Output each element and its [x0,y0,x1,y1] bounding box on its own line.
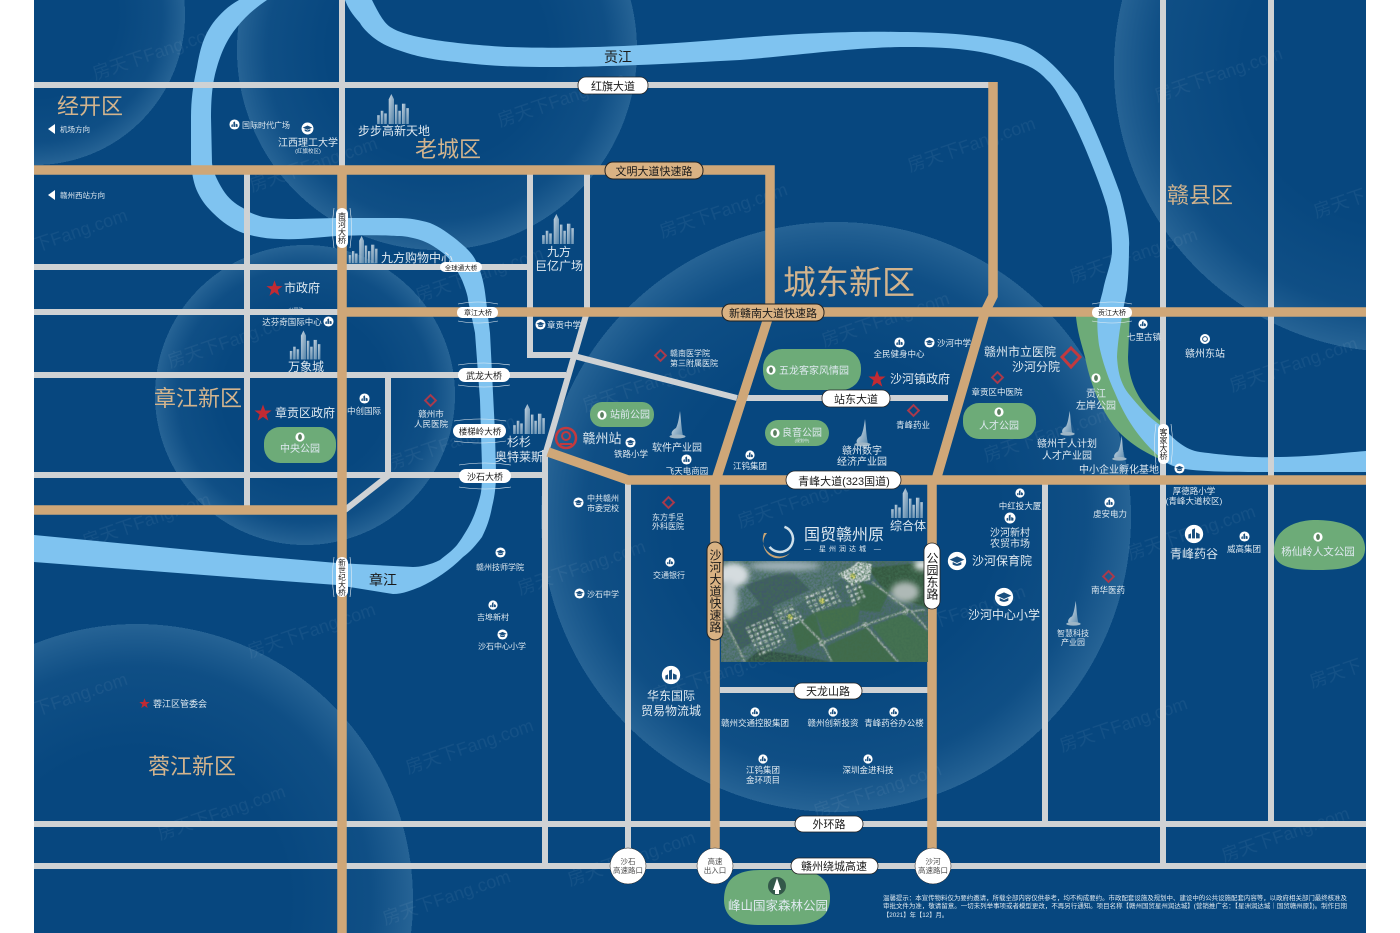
poi: 市政府 [266,280,320,296]
poi: 万象城 [288,331,324,374]
poi: 智慧科技产业园: 产业园 [1061,637,1085,647]
watermarks: 下Fang.com [31,669,130,720]
bridge: 楼梯岭大桥: 楼梯岭大桥 [459,426,502,436]
poi: 赣南医学院第三附属医院: 第三附属医院 [670,358,718,368]
poi: 青峰药业 [896,405,930,430]
poi: 中共赣州市委党校: 中共赣州 [587,493,619,503]
bridge: 章江大桥 [457,302,498,323]
park: 站前公园: 站前公园 [610,408,650,421]
poi: 赣州千人计划人才产业园: 人才产业园 [1042,449,1092,462]
label: 文明大道快速路: 文明大道快速路 [616,164,692,178]
exit: 高速出入口 [697,848,733,884]
poi: 章贡区中医院 [971,372,1023,397]
poi: 沙河保育院 [948,552,1032,570]
poi: 华东国际贸易物流城: 华东国际 [647,689,695,703]
label: 红旗大道 [578,77,648,94]
park: 人才公园: 人才公园 [979,419,1019,432]
poi: 贡江左岸公园: 贡江 [1086,388,1106,400]
district: 赣县区: 赣县区 [1167,183,1233,208]
poi: 沙河保育院: 沙河保育院 [972,553,1032,568]
poi: 深圳金进科技 [842,754,894,775]
poi: 杉杉奥特莱斯: 奥特莱斯 [495,449,543,464]
poi: 吉埠新村 [477,600,509,622]
bridge: 新世纪大桥 [332,557,352,597]
poi: 沙石中心小学: 沙石中心小学 [478,641,526,651]
poi: 赣州站 [556,428,622,448]
bridge: 南河大桥 [332,208,352,248]
watermarks: 房天下Fang.com [90,21,223,84]
poi: 南华医药: 南华医药 [1091,585,1125,595]
poi: 华东国际贸易物流城 [641,666,701,718]
poi: 青峰药谷办公楼 [864,707,924,728]
poi: 厚德路小学: 厚德路小学 [1173,486,1216,496]
label: 站东大道: 站东大道 [834,392,878,406]
poi: 贡江左岸公园: 左岸公园 [1076,399,1116,412]
watermarks: 房天下Fang.com [657,179,790,242]
poi: 中红投大厦: 中红投大厦 [999,501,1042,511]
watermarks: 房天下Fang.com [905,113,1038,176]
poi: 智慧科技产业园: 智慧科技 [1057,628,1089,638]
poi: 青峰药谷: 青峰药谷 [1170,547,1218,561]
watermarks: 房天下Fang.com [565,827,698,890]
watermarks: 房天下Fang.com [1227,333,1360,396]
poi: 中红投大厦 [999,488,1042,511]
poi: 江钨集团金环项目: 江钨集团 [746,765,780,775]
district: 城东新区: 城东新区 [783,264,915,301]
bridge: 沙石大桥 [459,463,511,489]
watermarks: 房天下Fang.com [245,599,378,662]
watermarks: 房天下Fang.com [155,781,288,844]
poi: 赣州站: 赣州站 [582,431,622,446]
poi: 中共赣州市委党校 [573,493,619,513]
project rendering [717,560,930,662]
label: 红旗大道: 红旗大道 [591,79,635,93]
poi: 万象城: 万象城 [288,360,324,374]
poi: 九方巨亿广场 [535,214,583,273]
poi: 蓉江区管委会: 蓉江区管委会 [153,698,207,709]
exit: 沙河高速路口 [915,848,951,884]
park: 中央公园: 中央公园 [280,442,320,455]
poi: 青峰药谷 [1170,525,1218,561]
district: 老城区: 老城区 [415,137,481,162]
poi: 沙河镇政府 [868,370,950,387]
poi: 江西理工大学: (红旗校区) [295,147,321,155]
poi: 赣州数字经济产业园: 赣州数字 [842,444,882,457]
road label: 金塘路: 金塘路 [625,522,631,539]
poi: 虔安电力: 虔安电力 [1093,509,1127,519]
river name: 贡江: 贡江 [604,49,632,65]
poi: 七里古镇 [1127,319,1161,342]
bridge: 全球通大桥 [440,262,482,272]
label: 公园东路: 公园东路 [925,552,939,601]
poi: 赣州数字经济产业园 [837,419,887,468]
bridge: 章江大桥: 章江大桥 [464,308,492,317]
exit: 沙河高速路口: 高速路口 [918,865,948,875]
poi: 赣南医学院第三附属医院 [655,348,718,368]
poi: 赣州千人计划人才产业园 [1037,411,1097,462]
poi: 赣州市人民医院: 赣州市 [418,409,444,419]
poi: 全民健身中心 [873,337,925,359]
watermarks: 房天下Fang.com [515,536,648,599]
direction arrow: 机场方向 [48,124,90,134]
watermarks: 房天下Fang.com [495,68,628,131]
road label: 章江大道: 章江大道 [285,372,305,379]
poi: 赣州市人民医院 [414,395,448,429]
poi: 江钨集团: 江钨集团 [733,461,767,471]
exit: 沙河高速路口: 沙河 [926,857,941,866]
bridge: 客家大桥: 客家大桥 [1159,427,1168,461]
poi: 厚德路小学 [1166,463,1222,506]
exit: 沙石高速路口: 高速路口 [613,865,643,875]
road label: 贡江大道: 贡江大道 [1160,598,1166,619]
poi: 国际时代广场: 国际时代广场 [242,120,290,130]
watermarks: 房天下Fang.com [1219,803,1352,866]
poi: 中创国际: 中创国际 [347,406,381,416]
district: 章江新区: 章江新区 [154,386,242,411]
poi: 九方巨亿广场: 九方 [547,244,571,259]
poi: 贡江左岸公园 [1076,373,1116,412]
bridge: 楼梯岭大桥 [453,419,506,443]
poi: 九方购物中心 [349,236,453,265]
label: 新赣南大道快速路: 新赣南大道快速路 [729,306,817,320]
watermarks: 房天下Fang.com [981,403,1114,466]
poi: 章贡区中医院: 章贡区中医院 [971,387,1023,397]
poi: 赣州交通控股集团: 赣州交通控股集团 [721,718,789,728]
poi: 青峰药谷办公楼: 青峰药谷办公楼 [864,718,924,728]
poi: 软件产业园: 软件产业园 [652,441,702,454]
bridge: 新世纪大桥: 新世纪大桥 [337,557,346,597]
poi: 虔安电力 [1093,497,1127,519]
park: 杨仙岭人文公园 [1274,520,1365,570]
poi: 中小企业孵化基地 [1079,436,1159,476]
park: 人才公园 [963,403,1036,439]
label: 文明大道快速路 [605,162,703,179]
poi: 交通银行 [653,557,685,580]
poi: 章贡区政府 [254,404,335,421]
park: 良音公园 [765,420,829,446]
poi: 综合体: 综合体 [890,518,926,533]
poi: 赣南医学院第三附属医院: 赣南医学院 [670,348,710,358]
bridge: 贡江大桥 [1092,302,1132,323]
watermarks: 下Fang.com [31,205,130,256]
logo: 国贸赣州原 [763,522,884,558]
exit: 沙石高速路口: 沙石 [620,857,636,866]
bridge: 客家大桥 [1154,424,1172,464]
poi: 沙河镇政府: 沙河镇政府 [890,371,950,386]
park: 站前公园 [590,402,654,427]
poi: 中创国际 [347,393,381,416]
poi: 江钨集团金环项目: 金环项目 [746,775,780,785]
poi: 江西理工大学: 江西理工大学 [278,136,338,149]
poi: 市政府: 市政府 [284,280,320,295]
watermarks: 房天下Fang.com [413,243,546,306]
disclaimer: 审批文件为准，敬请留意。一切未列举事项或者模型更改，不再另行通知。项目名称【赣州国贸星州润达城】(营销推广名：【星洲润达城｜国贸赣州原】)。制作日期 [883,901,1347,910]
poi: 综合体 [890,488,926,533]
road label: 红旗大道 (vertical): 红旗大道 [385,419,391,441]
poi: 华东国际贸易物流城: 贸易物流城 [641,704,701,718]
watermarks: 房天下Fang.com [403,715,536,778]
label: 站东大道 [822,390,890,407]
poi: 软件产业园 [652,411,702,454]
poi: 沙河新村农贸市场 [990,512,1030,550]
label: 赣州绕城高速: 赣州绕城高速 [801,859,867,873]
watermarks: 房天下 [1311,185,1368,222]
poi: 沙河新村农贸市场: 农贸市场 [990,537,1030,550]
poi: 杉杉奥特莱斯 [495,404,545,464]
district: 经开区: 经开区 [57,94,123,119]
bridge: 沙石大桥: 沙石大桥 [467,471,503,482]
poi: 赣州东站 [1185,334,1225,360]
watermarks: 房天下Fang.com [385,411,518,474]
park: 良音公园: 良音公园 [782,426,822,439]
exit: 高速出入口: 出入口 [704,865,726,875]
poi: 飞天电商园 [666,454,708,476]
poi: 赣州市人民医院: 人民医院 [414,419,448,429]
watermarks: 房天下Fang.com [380,866,513,929]
poi: 杉杉奥特莱斯: 杉杉 [507,435,531,449]
bridge: 武龙大桥 [458,363,510,387]
bridge: 贡江大桥: 贡江大桥 [1098,308,1126,317]
park: 良音公园: (规划中) [795,437,810,443]
watermarks: 房天下Fang.com [1125,501,1258,564]
river: 章江 [34,0,496,594]
poi: 达芬奇国际中心: 达芬奇国际中心 [262,317,322,327]
poi: 深圳金进科技: 深圳金进科技 [842,765,894,775]
label: 外环路: 外环路 [812,818,846,831]
watermarks: 房天下Fang.com [165,309,298,372]
park: 峰山国家森林公园: 峰山国家森林公园 [728,898,828,913]
watermarks: 房天下Fang.com [811,759,944,822]
watermarks: 房天下Fang.com [650,643,783,706]
poi: 国际时代广场 [229,119,290,130]
poi: 赣州技师学院 [476,547,524,572]
park: 中央公园 [264,427,336,463]
label: 沙河大道快速路: 沙河大道快速路 [708,549,722,634]
road label: 武陵大道: 武陵大道 [1042,597,1048,619]
poi: 智慧科技产业园 [1057,601,1089,647]
poi: 赣州交通控股集团 [721,707,789,728]
poi: 中共赣州市委党校: 市委党校 [587,503,619,513]
label: 外环路 [795,816,863,832]
poi: 沙河新村农贸市场: 沙河新村 [990,526,1030,539]
poi: 赣州市立医院沙河分院: 沙河分院 [1012,360,1060,374]
poi: 东方手足外科医院 [652,497,684,531]
poi: 吉埠新村: 吉埠新村 [477,612,509,622]
park: 五龙客家风情园 [763,349,861,390]
poi: 赣州东站: 赣州东站 [1185,347,1225,360]
river name: 章江: 章江 [369,572,397,588]
poi: 中小企业孵化基地: 中小企业孵化基地 [1079,463,1159,476]
poi: 威高集团 [1227,531,1261,554]
watermarks: 房天下Fang.com [735,469,868,532]
poi: 章贡中学: 章贡中学 [547,320,582,330]
direction arrow: 机场方向: 机场方向 [60,124,90,134]
watermarks: 房天下Fang.com [580,353,713,416]
poi: 沙河中学 [924,337,972,348]
poi: 九方巨亿广场: 巨亿广场 [535,258,583,273]
watermarks: 房天下 [1307,655,1364,692]
poi: 沙河中心小学 [968,588,1040,622]
poi: 江西理工大学 [278,123,338,155]
poi: 赣州技师学院: 赣州技师学院 [476,562,524,572]
poi: 九方购物中心: 九方购物中心 [381,250,453,265]
poi: 步步高新天地: 步步高新天地 [358,123,430,138]
label: 天龙山路 [794,683,862,699]
poi: 东方手足外科医院: 外科医院 [652,521,684,531]
bridge: 全球通大桥: 全球通大桥 [445,263,478,272]
disclaimer: 温馨提示：本宣传物料仅为要约邀请，所载全部内容仅供参考，均不构成要约。市政配套设施及规划中、建设中的公共设施配套内容等，以政府相关部门最终核准及 [883,893,1348,902]
label: 天龙山路: 天龙山路 [806,685,850,698]
poi: 南华医药 [1091,571,1125,595]
watermarks: 房天下Fang.com [80,489,213,552]
direction arrow: 赣州西站方向: 赣州西站方向 [60,190,105,200]
贡江左岸 green belt [1076,312,1168,459]
poi: 赣州创新投资: 赣州创新投资 [807,718,859,728]
label: 新赣南大道快速路 [722,304,824,321]
poi: 沙河中学: 沙河中学 [937,338,972,348]
disclaimer [883,893,1348,919]
poi: 威高集团: 威高集团 [1227,544,1261,554]
exit: 高速出入口: 高速 [708,856,723,866]
watermarks: 房天下Fang.com [895,581,1028,644]
watermarks: 房天下Fang.com [1067,224,1200,287]
disclaimer: 【2021】年【12】月。 [883,910,948,919]
poi: 飞天电商园: 飞天电商园 [666,466,708,476]
poi: 赣州市立医院沙河分院 [984,344,1080,374]
logo: 国贸赣州原: 国贸赣州原 [804,526,884,544]
watermarks: 房天下Fang.com [1152,43,1285,106]
poi: 交通银行: 交通银行 [653,570,685,580]
poi: 沙石中学 [574,588,619,599]
road label: 长江大道: 长江大道 [285,472,305,479]
river: 贡江 [345,0,1366,472]
poi: 赣州千人计划人才产业园: 赣州千人计划 [1037,437,1097,450]
poi: 青峰药业: 青峰药业 [896,420,930,430]
poi: 七里古镇: 七里古镇 [1127,332,1161,342]
poi: 赣州创新投资 [807,707,859,728]
poi: 沙石中心小学 [478,629,526,651]
bridge: 南河大桥: 南河大桥 [338,211,346,245]
poi: 沙石中学: 沙石中学 [587,589,619,599]
poi: 赣州数字经济产业园: 经济产业园 [837,455,887,468]
label: 青峰大道(323国道) [786,471,901,489]
poi: 江钨集团 [733,450,767,471]
park: 杨仙岭人文公园: 杨仙岭人文公园 [1281,545,1355,558]
park: 五龙客家风情园: 五龙客家风情园 [779,364,849,377]
poi: 江钨集团金环项目 [746,754,780,785]
road label: 兴国路: 兴国路 [288,307,304,314]
poi: 铁路小学: 铁路小学 [614,449,648,459]
label: 青峰大道(323国道): 青峰大道(323国道) [798,474,890,488]
poi: 赣州市立医院沙河分院: 赣州市立医院 [984,344,1056,359]
poi: 厚德路小学: (青峰大道校区) [1166,496,1222,506]
bridge: 武龙大桥: 武龙大桥 [466,370,502,381]
poi: 铁路小学 [614,437,648,459]
logo: 国贸赣州原: — 星州润达城 — [804,544,884,553]
label: 公园东路 [924,543,940,609]
exit: 沙石高速路口 [610,848,646,884]
poi: 章贡区政府: 章贡区政府 [275,405,335,420]
watermarks: 房天下Fang.com [819,288,952,351]
watermarks: 房天下Fang.com [1057,693,1190,756]
poi: 步步高新天地 [358,94,430,138]
district: 蓉江新区: 蓉江新区 [148,754,236,779]
label: 赣州绕城高速 [791,858,878,874]
watermarks: 房天下Fang.com [247,133,380,196]
poi: 沙河中心小学: 沙河中心小学 [968,607,1040,622]
poi: 东方手足外科医院: 东方手足 [652,512,684,522]
poi: 全民健身中心: 全民健身中心 [873,349,925,359]
park: 峰山国家森林公园 [724,870,830,925]
